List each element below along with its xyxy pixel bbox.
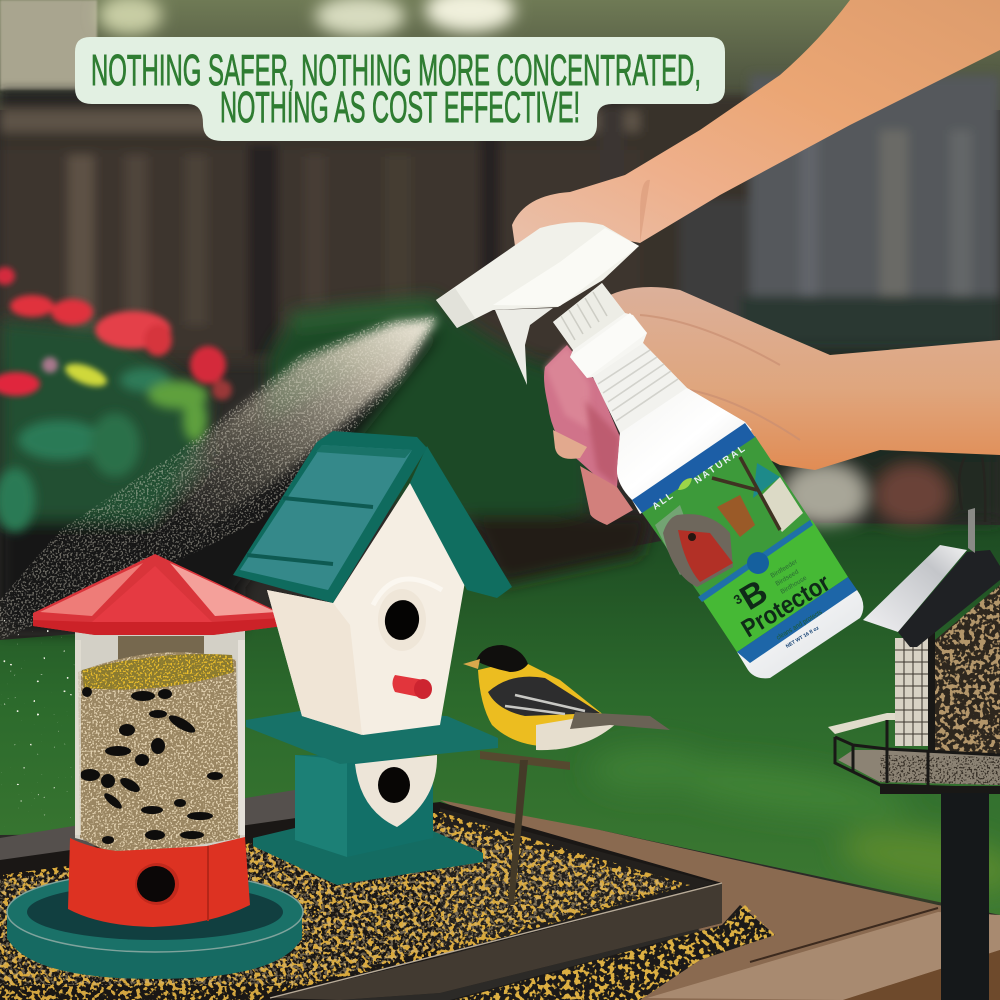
blue band upper	[632, 423, 755, 513]
knuckle creases	[640, 315, 800, 440]
platform	[246, 711, 498, 764]
bottom cap	[737, 590, 863, 678]
post	[941, 793, 989, 1000]
label brand art	[655, 457, 803, 587]
label text: cleans and protects	[775, 609, 824, 642]
label text: Birdfeeder	[769, 558, 799, 580]
label text: NET WT 16 fl oz	[785, 625, 821, 650]
green label	[700, 520, 848, 652]
label text: ALL	[650, 489, 677, 512]
bright lawn patches	[590, 748, 1000, 903]
upper arm and hand	[512, 0, 1000, 246]
beak	[463, 659, 480, 669]
seed tray	[0, 802, 775, 1000]
blossoms	[0, 267, 232, 400]
body	[478, 660, 610, 746]
red roof	[33, 554, 283, 635]
neck ring	[570, 313, 647, 378]
seed compartment	[935, 585, 1000, 755]
red feeder	[7, 554, 303, 979]
blue band lower	[737, 577, 857, 663]
lower arm and hand	[544, 287, 1000, 525]
pink glove fingers	[544, 345, 620, 487]
label text: 3	[731, 591, 745, 608]
label text: Birdseed	[774, 568, 800, 588]
wing	[488, 677, 600, 716]
trigger hook	[495, 308, 553, 385]
label text	[650, 442, 835, 650]
foliage	[0, 368, 208, 532]
feeder roof	[863, 545, 1000, 647]
label text: Birdhouse	[779, 574, 808, 596]
label text: B	[734, 573, 774, 618]
lower hole	[378, 767, 410, 803]
mesh panel	[895, 638, 928, 746]
collar	[553, 283, 625, 350]
flowers	[0, 267, 440, 630]
spray mist	[0, 316, 438, 830]
seed cylinder	[75, 630, 245, 858]
red peg	[392, 675, 432, 699]
bird on perch	[463, 645, 670, 905]
lawn	[0, 522, 1000, 915]
red base	[68, 837, 250, 927]
hedge	[268, 296, 1000, 585]
house body	[267, 483, 467, 735]
headline text: NOTHING AS COST EFFECTIVE!	[220, 83, 580, 132]
headline text	[91, 46, 701, 132]
lower post	[253, 755, 483, 885]
perch	[480, 751, 570, 905]
feeder dish	[7, 872, 303, 979]
spray bottle	[436, 222, 863, 678]
bottle silhouette	[553, 283, 755, 514]
leaf icon	[678, 478, 692, 490]
ribbed neck	[593, 343, 687, 433]
house roof	[233, 431, 512, 603]
head	[476, 645, 528, 672]
lower entrance plate	[355, 755, 437, 827]
headline banner	[75, 37, 725, 141]
sprayer head	[436, 222, 639, 328]
tail	[570, 712, 670, 730]
label text: NATURAL	[692, 442, 749, 486]
hanger	[959, 457, 985, 553]
deck table	[0, 790, 1000, 1000]
label text: Protector	[737, 569, 835, 643]
label photo	[640, 436, 812, 598]
shoulder	[617, 388, 752, 500]
tray	[828, 713, 1000, 794]
green and white birdhouse	[233, 431, 512, 885]
right hanging feeder	[828, 457, 1000, 1000]
dark seeds	[80, 687, 223, 844]
